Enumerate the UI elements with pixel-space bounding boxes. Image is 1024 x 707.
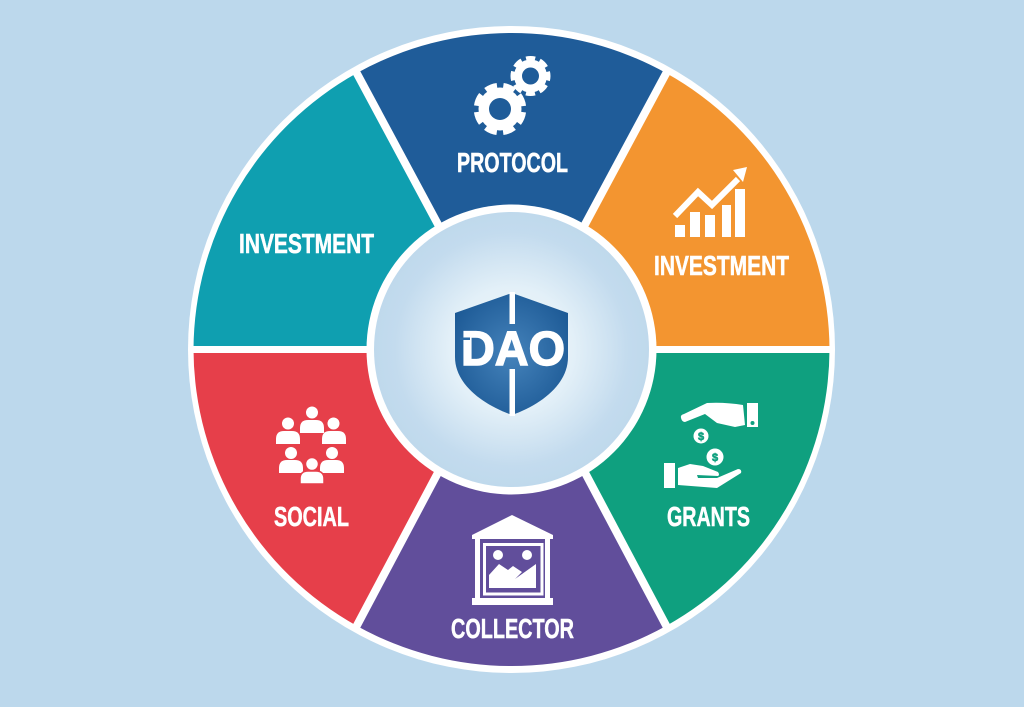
icon: museum with picture (472, 515, 553, 605)
outer white ring (188, 26, 835, 673)
panel: social (194, 350, 512, 626)
label: investment orange: INVESTMENT (654, 250, 789, 281)
label: collector: COLLECTOR (451, 613, 574, 644)
shield text: DAO (461, 323, 565, 376)
hub disc (374, 212, 649, 487)
label: social: SOCIAL (274, 501, 349, 532)
D letter notch (460, 338, 470, 340)
segment: grants (512, 350, 830, 626)
panel: investment (orange) (512, 73, 830, 350)
icon: giving hands and coins: $ (712, 452, 718, 464)
segment: social (194, 350, 512, 626)
icon: gears (477, 58, 548, 132)
panel: investment (teal) (194, 73, 512, 350)
label: protocol: PROTOCOL (457, 147, 568, 178)
icon: DAO shield (455, 292, 568, 416)
segment: collector (357, 350, 666, 666)
panel: grants (512, 350, 830, 626)
icon: giving hands and coins (664, 403, 758, 488)
panel: collector (357, 350, 666, 666)
hub ring (366, 204, 656, 494)
segment: protocol (357, 33, 666, 350)
segment dividers (190, 68, 833, 631)
label: grants: GRANTS (667, 501, 750, 532)
segment: investment teal (194, 73, 512, 350)
icon: community of people (276, 406, 346, 484)
panel: protocol (357, 33, 666, 350)
central hub (366, 204, 656, 494)
icon: giving hands and coins: $ (698, 431, 704, 443)
segment: investment orange (512, 73, 830, 350)
label: investment teal: INVESTMENT (239, 228, 374, 259)
icon: growth chart (675, 167, 747, 237)
